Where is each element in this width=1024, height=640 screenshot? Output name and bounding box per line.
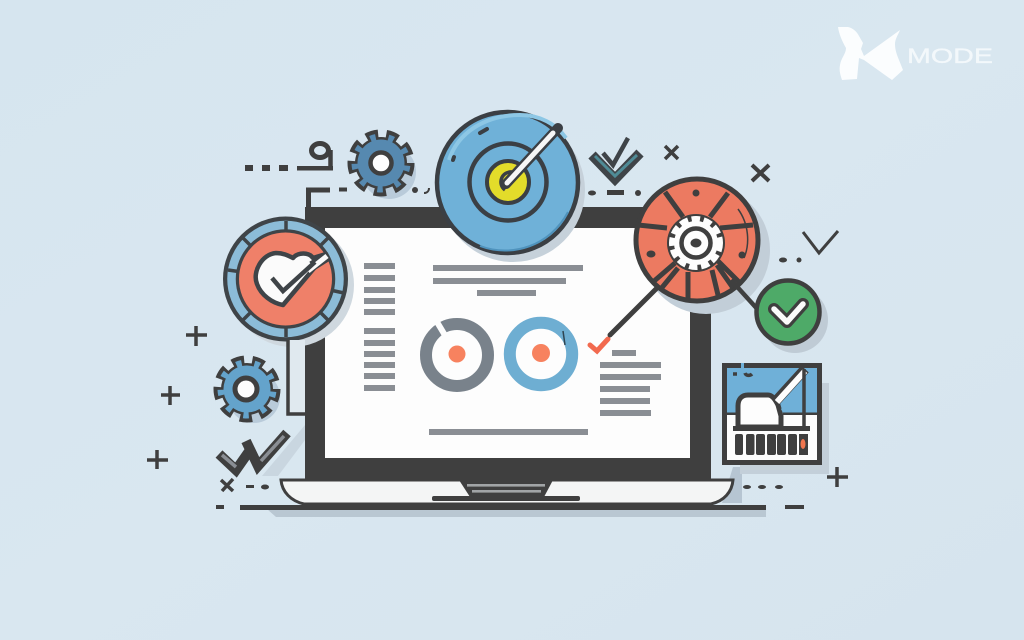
card keys: [735, 434, 808, 455]
screen text right block: [600, 350, 661, 416]
wheel dots: [692, 190, 700, 196]
q-shaped glyph icon: [312, 144, 330, 170]
target dart: [506, 128, 558, 184]
orange check mark: [590, 339, 608, 351]
dots under double check: [588, 190, 641, 196]
lower left gear: [221, 363, 280, 423]
badge outer ring: [223, 216, 348, 342]
plus mark right: [827, 467, 848, 487]
target badge: [437, 112, 585, 262]
green check badge: [731, 280, 828, 353]
laptop: [240, 207, 766, 517]
laptop bracket left lower: [262, 340, 305, 476]
grey donut chart: [426, 322, 488, 386]
card frame: [724, 366, 820, 462]
laptop hinge: [459, 480, 553, 497]
logo: MODE: [838, 27, 993, 80]
card machine: [738, 395, 781, 427]
logo: MODE: MODE: [907, 45, 993, 68]
double check lower left: [219, 433, 287, 470]
laptop shadow: [267, 509, 766, 517]
desk line: [240, 505, 766, 510]
green badge shadow: [762, 287, 828, 353]
badge check: [272, 262, 315, 291]
target ring: [470, 144, 546, 220]
target outer disc: [437, 112, 578, 253]
laptop screen frame: [305, 207, 711, 480]
blue donut chart: [510, 323, 572, 385]
target shadow: [441, 118, 585, 262]
wheel shadow: [642, 186, 770, 314]
wheel centre gear: [667, 214, 725, 272]
green badge disc: [756, 280, 820, 344]
dashes lower right: [743, 485, 804, 509]
connector line to green badge: [731, 280, 760, 312]
card shadow: [740, 383, 829, 474]
gear wheel badge: [636, 179, 770, 314]
badge heart: [256, 253, 326, 305]
laptop foot: [432, 496, 580, 501]
screen text top block: [433, 265, 583, 296]
target bullseye: [487, 161, 529, 203]
x mark right: [752, 165, 769, 181]
outline check right: [803, 231, 838, 253]
wheel disc: [636, 179, 758, 301]
x mark top: [665, 146, 678, 159]
plus marks left: [147, 326, 207, 469]
connector line to check: [610, 288, 657, 335]
top left gear: [355, 137, 416, 199]
laptop frame bracket left top: [308, 190, 330, 207]
target highlight: [449, 115, 566, 160]
dashes lower left: [216, 484, 269, 509]
card border: [724, 366, 820, 462]
screen text bottom line: [429, 429, 588, 435]
card sky: [724, 365, 820, 413]
machine card: [724, 363, 829, 474]
badge coral disc: [238, 232, 333, 326]
double check top: [592, 138, 640, 179]
laptop screen: [325, 228, 690, 458]
laptop base: [281, 480, 733, 504]
wheel spokes: [638, 192, 753, 300]
top left dashes: [245, 165, 429, 193]
green badge check: [774, 304, 803, 322]
badge shadow: [230, 223, 354, 347]
screen text left column: [364, 263, 395, 391]
x mark lower left: [221, 479, 233, 491]
dots right: [779, 258, 802, 262]
heart check badge: [223, 216, 354, 347]
